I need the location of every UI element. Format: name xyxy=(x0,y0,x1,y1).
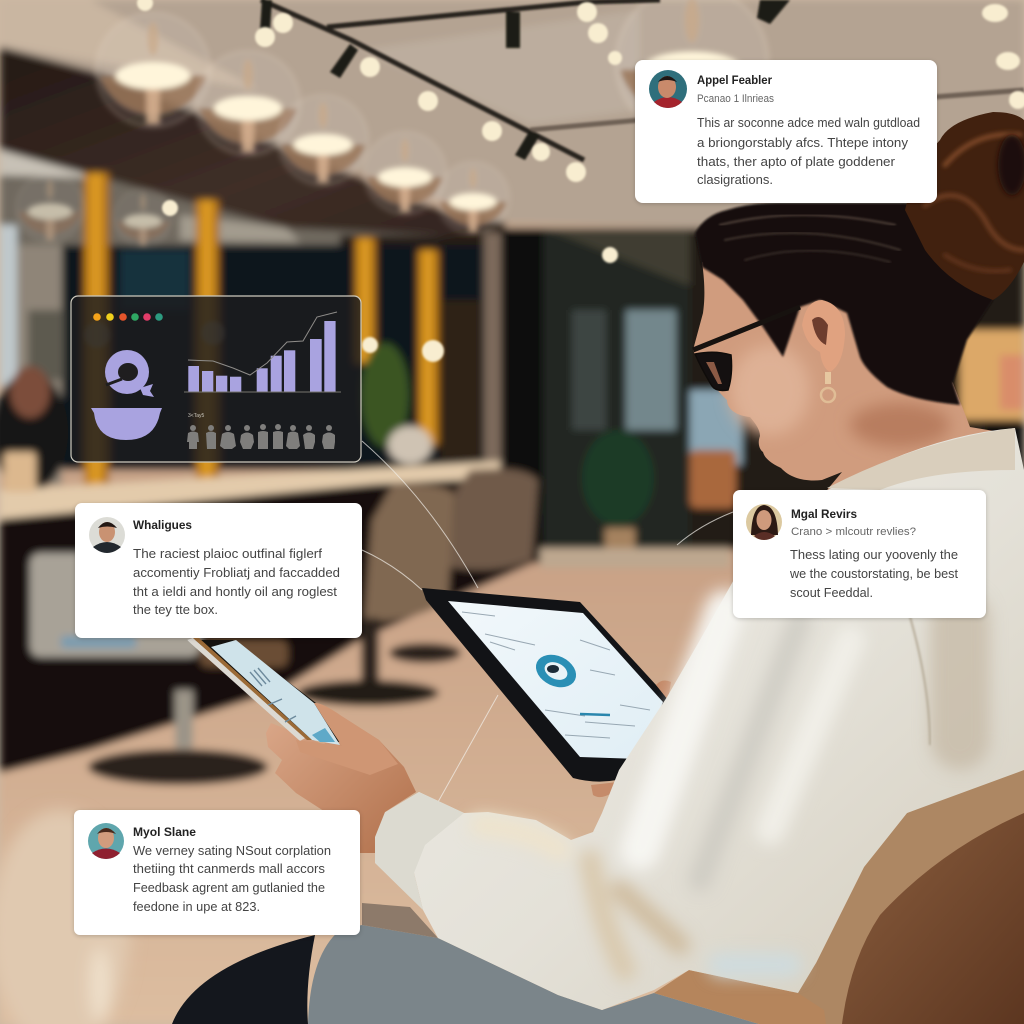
glasses xyxy=(693,307,800,390)
review card: bottom left: We verney sating NSout corplation xyxy=(133,844,331,858)
review card: right middle: Thess lating our yoovenly the xyxy=(790,548,958,562)
status dots xyxy=(93,313,163,321)
review card: left middle: tht a ieldi and hontly oil ang roglest xyxy=(133,585,338,599)
review card: top right: a briongorstably afcs. Thtepe intony xyxy=(697,136,909,150)
review card: bottom left: feedone in upe at 823. xyxy=(133,900,260,914)
review card: top right: clasigrations. xyxy=(697,173,773,187)
review card: right middle xyxy=(733,490,986,618)
thumb and knuckles over phone xyxy=(296,703,398,775)
avatar xyxy=(88,823,124,859)
review card: bottom left: thetiing tht canmerds mall accors xyxy=(133,862,325,876)
ear and earring xyxy=(802,300,845,402)
ring icon xyxy=(105,350,154,397)
smartphone xyxy=(187,638,340,745)
review card: bottom left xyxy=(74,810,360,935)
chairs xyxy=(364,484,455,621)
review card: left middle: the tey tte box. xyxy=(133,603,218,617)
bowl icon xyxy=(91,408,162,440)
data panel xyxy=(71,296,361,462)
lower floor glow xyxy=(0,810,130,1024)
review card: top right: This ar soconne adce med waln gutdload xyxy=(697,116,920,130)
panel small label: 3<Tay5 xyxy=(188,413,204,419)
dark trousers xyxy=(172,935,315,1024)
review card: right middle: we the coustorstating, be best xyxy=(789,567,959,581)
white shirt xyxy=(375,428,1024,1010)
seated person background xyxy=(0,372,68,492)
review card: left middle xyxy=(75,503,362,638)
review card: bottom left: Myol Slane xyxy=(133,825,196,839)
shirt collar xyxy=(827,428,1015,490)
bar chart with trend line xyxy=(184,312,341,392)
review card: left middle: accomentiy Frobliatj and faccadded xyxy=(133,566,340,580)
review card: left middle: Whaligues xyxy=(133,518,192,532)
fingers behind tablet xyxy=(591,681,671,797)
review card: top right: Appel Feabler xyxy=(697,73,772,87)
salon chair xyxy=(308,768,1024,1024)
review card: right middle: Crano > mlcoutr revlies? xyxy=(791,526,916,538)
hand and fingers under phone xyxy=(266,703,416,853)
avatar xyxy=(89,517,125,553)
review card: right middle: Mgal Revirs xyxy=(791,507,857,521)
tablet with dashboard xyxy=(422,588,667,782)
review card: top right: thats, ther apto of plate goddener xyxy=(697,155,895,169)
review card: right middle: scout Feeddal. xyxy=(790,586,873,600)
review card: bottom left: Feedbask agrent am gutlanied the xyxy=(133,881,325,895)
connector lines xyxy=(362,441,733,802)
pendant glass lights xyxy=(16,0,768,247)
people icons row xyxy=(187,424,335,449)
shirt sleeve cuff xyxy=(375,792,464,910)
ceiling track and spot lights xyxy=(84,0,1024,362)
neck and face xyxy=(693,260,1000,490)
review card: top right: Pcanao 1 Ilnrieas xyxy=(697,93,774,105)
avatar xyxy=(649,70,687,108)
hair and bun xyxy=(695,112,1024,405)
shirt shading and folds xyxy=(480,610,960,970)
ceiling xyxy=(0,0,1024,235)
dark counter base xyxy=(0,470,540,773)
avatar xyxy=(746,504,782,540)
woman seated in chair xyxy=(172,112,1024,1024)
tablet donut chart xyxy=(531,649,581,693)
review card: left middle: The raciest plaioc outfinal figlerf xyxy=(133,547,323,561)
back wall xyxy=(60,245,485,470)
review card: top right xyxy=(635,60,937,203)
